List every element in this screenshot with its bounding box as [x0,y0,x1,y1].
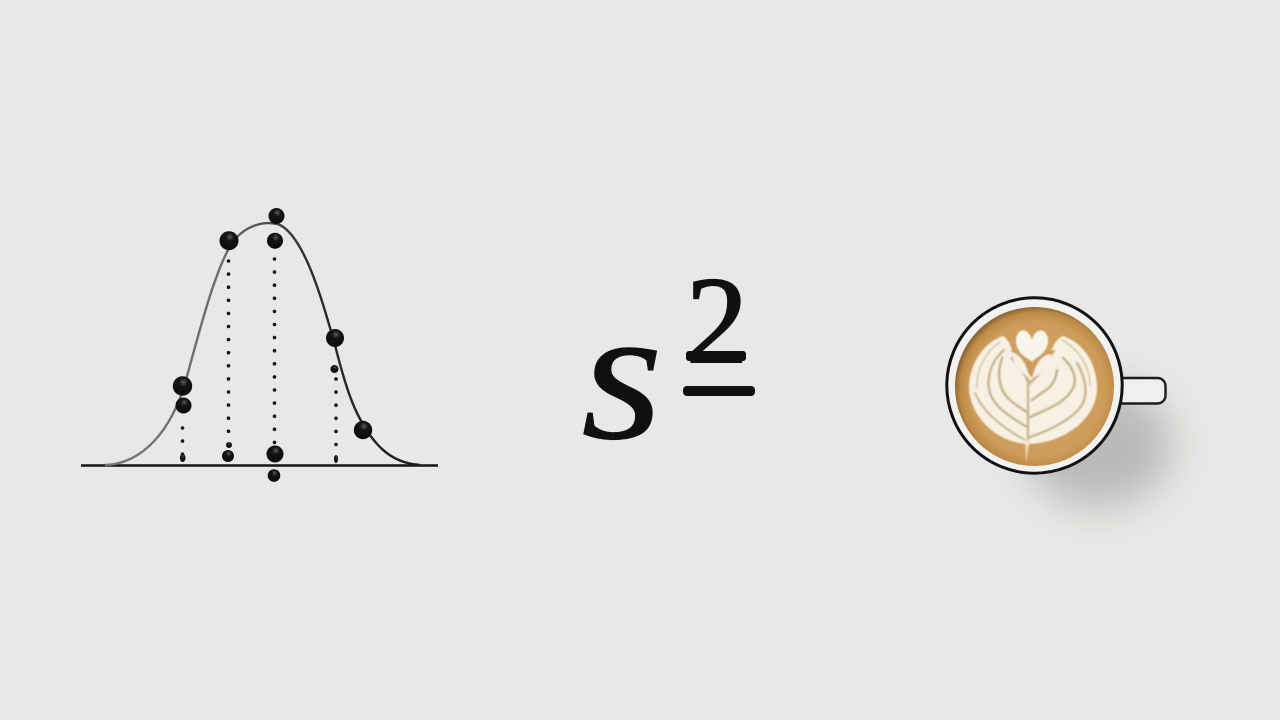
tail [1024,440,1031,465]
data points [173,208,372,482]
baseline axis [81,464,438,467]
tan veins [975,340,1090,440]
dotted drop lines [182,259,336,462]
rosetta body [969,336,1097,444]
upper bar [686,351,746,361]
wedge behind heart [1010,350,1056,378]
formula: s squared [581,252,755,480]
cup rim [947,298,1122,473]
heart [1016,330,1048,361]
lower bar [683,386,755,396]
latte art [969,330,1097,465]
handle [1112,378,1166,404]
leaf tips [1012,352,1029,378]
letter s: s [581,267,663,480]
cast shadow [1024,383,1172,507]
coffee surface [955,307,1114,466]
superscript 2: 2 [686,252,748,389]
coffee cup, top view [947,298,1172,507]
bell curve [105,223,420,465]
chart: normal distribution with data points [81,208,438,482]
